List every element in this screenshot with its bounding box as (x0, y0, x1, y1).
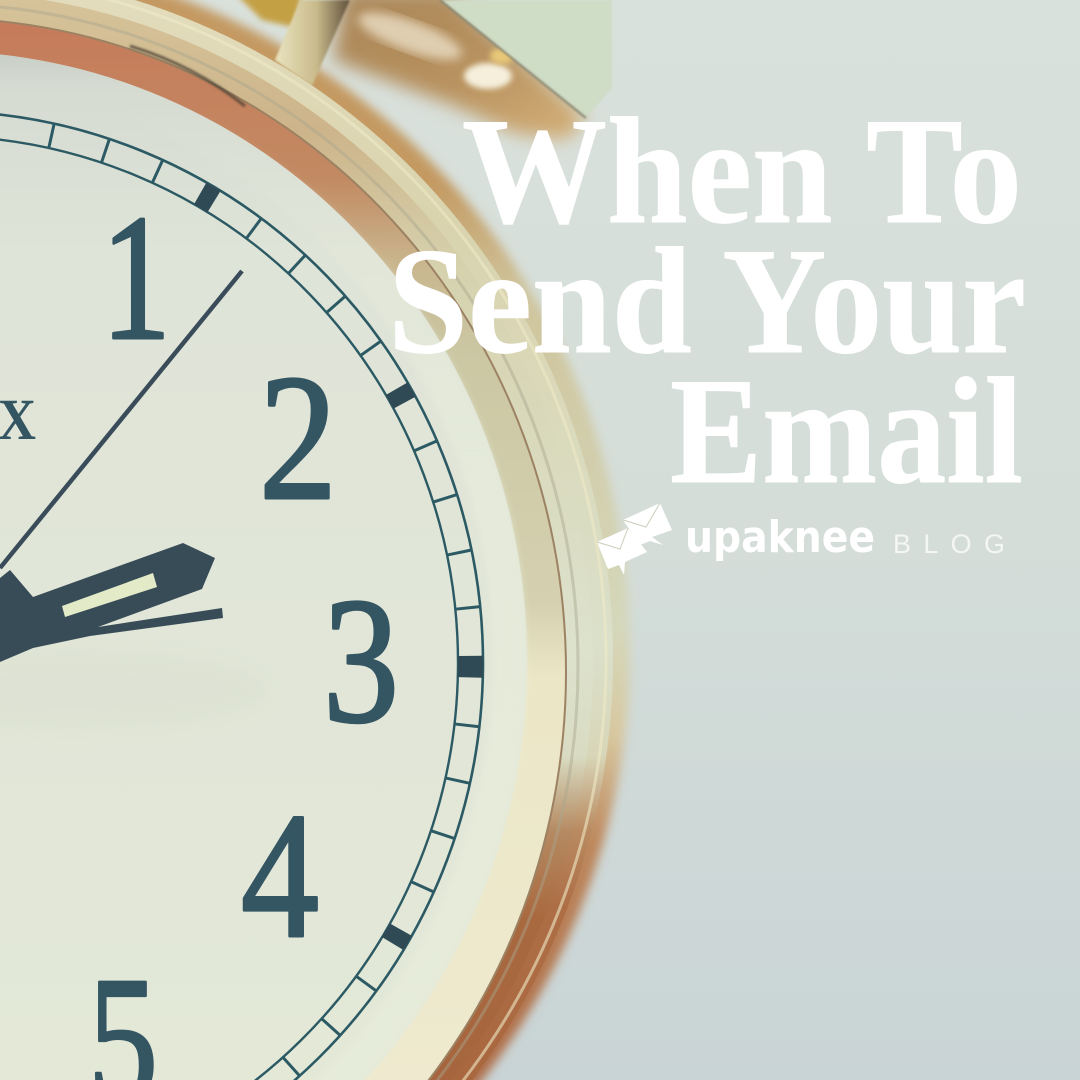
dial shadow (0, 650, 270, 730)
title: When To (462, 87, 1022, 255)
clock rim (0, 0, 630, 1080)
clock numerals: 3 (323, 561, 399, 760)
clock numerals: 1 (101, 178, 171, 377)
clock body (0, 0, 630, 1080)
title: Send Your (388, 217, 1026, 385)
blog label: BLOG (893, 529, 1005, 559)
minute track (0, 104, 490, 1080)
brand name: upaknee (685, 512, 875, 563)
dial highlight band (362, 237, 528, 638)
clock dial (0, 51, 527, 1080)
clock numerals (0, 178, 399, 1080)
clock numerals: 2 (259, 338, 337, 537)
title: Email (670, 347, 1023, 515)
icon: clock bell (232, 0, 612, 140)
logo: upaknee blog (597, 503, 1005, 575)
clock numerals: 4 (241, 776, 319, 975)
title (388, 87, 1026, 515)
icon: envelopes (597, 503, 672, 575)
clock hands (0, 271, 242, 662)
